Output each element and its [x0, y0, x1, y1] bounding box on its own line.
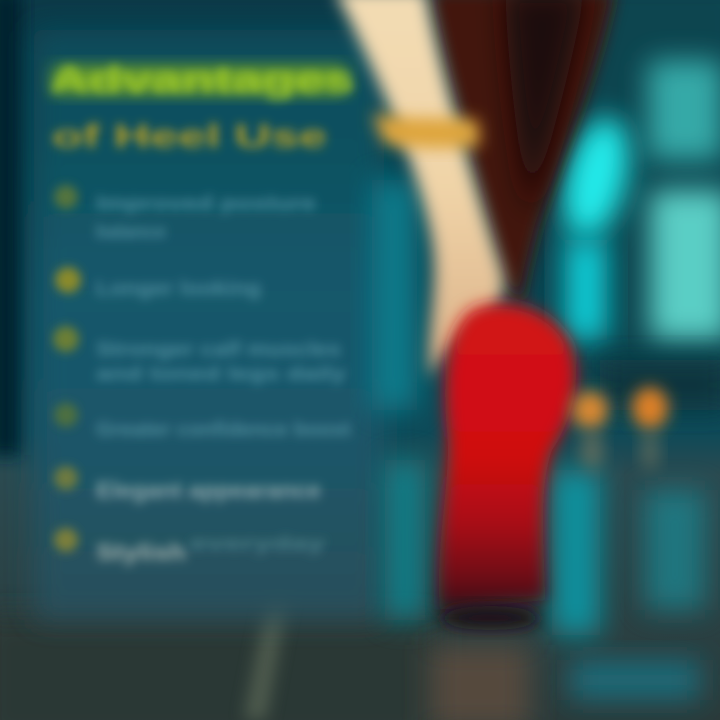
shoe base shadow: [440, 606, 540, 630]
item 1: [54, 185, 316, 243]
item 3: Stronger calf muscles: [96, 339, 341, 361]
shoe body: [439, 303, 576, 610]
illustration: leg and red heel: [335, 0, 615, 720]
item 5: [54, 466, 321, 503]
ankle band: [372, 114, 480, 148]
reflection under shoe: [430, 645, 530, 720]
item 1: Improved posture: [96, 193, 316, 215]
dark drape core: [505, 0, 585, 215]
item 6: everyday: [190, 534, 326, 555]
item 3: and toned legs daily: [96, 364, 347, 385]
item 6: Stylish: [96, 539, 186, 565]
background: dark left edge: [0, 0, 22, 455]
right backdrop glow: [372, 0, 720, 700]
item 1: balance: [96, 222, 166, 243]
item 6: [54, 528, 326, 565]
item 3: [53, 326, 347, 385]
item 5: Elegant appearance: [96, 477, 321, 503]
panel background: [34, 30, 384, 620]
list items: [53, 185, 351, 565]
dark trouser drape: [430, 0, 615, 305]
item 2: Longer looking: [96, 278, 261, 300]
heading line one: Advantages: [50, 59, 355, 100]
background: floor light streak: [244, 575, 292, 720]
panel: advantages list: [34, 30, 384, 620]
background: floor: [0, 615, 440, 720]
leg: [335, 0, 504, 380]
item 4: [54, 403, 351, 441]
heading: [50, 59, 355, 154]
heading line two: of Heel Use: [52, 118, 327, 154]
orange lights: [572, 387, 668, 470]
heading glow: [52, 66, 347, 94]
item 2: [55, 267, 261, 300]
item 4: Greater confidence boost: [96, 419, 351, 441]
